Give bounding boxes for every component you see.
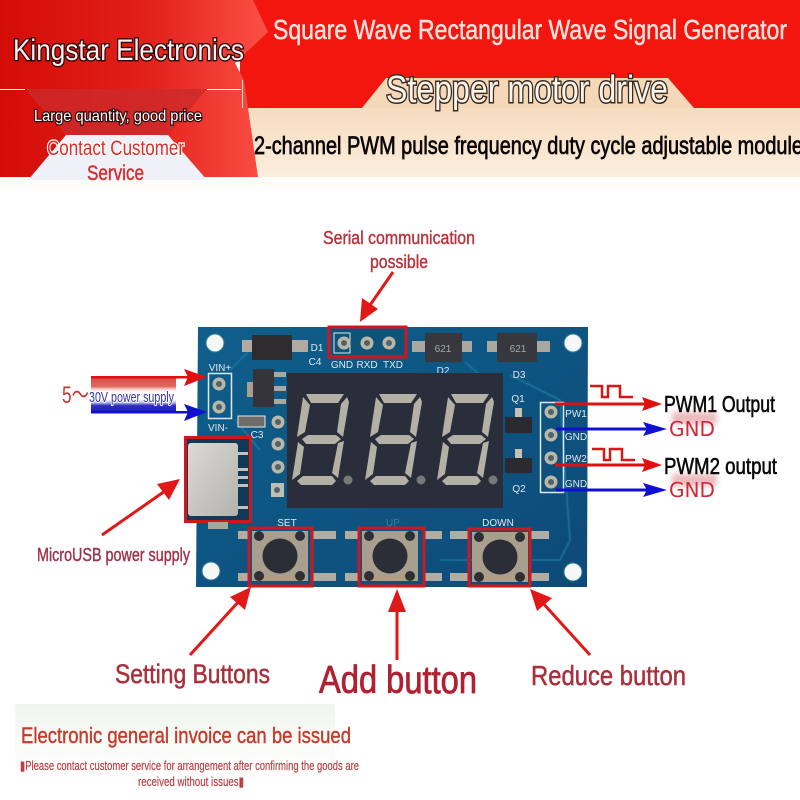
diode D3 (487, 333, 550, 381)
label: serial communication: Serial communication (323, 228, 475, 248)
label: voltage range (62, 382, 174, 409)
serial header: RXD (356, 360, 378, 371)
diode D2: D2 (437, 366, 450, 377)
label: GND2: GND (669, 478, 715, 502)
brand name: Kingstar Electronics (13, 34, 244, 67)
PWM2 pulse icon (592, 449, 635, 460)
regulator (247, 369, 286, 407)
label: voltage range: 5～ (62, 382, 89, 409)
button labels: SET (277, 518, 297, 529)
contact link (47, 137, 184, 185)
arrow: GND1 (556, 422, 667, 436)
diode D3: D3 (513, 370, 526, 381)
arrow: GND2 (556, 483, 667, 497)
arrow: VIN+ red (91, 369, 207, 393)
SET button (249, 528, 312, 586)
PWM output header (540, 402, 587, 492)
arrow: PWM2 (555, 458, 662, 472)
label: micro USB: MicroUSB power supply (37, 545, 190, 565)
power input header (208, 363, 232, 434)
header banner: right (0, 0, 800, 189)
button labels: DOWN (482, 518, 514, 529)
through holes (271, 416, 284, 497)
diode D1 (242, 335, 324, 368)
label: setting buttons: Setting Buttons (115, 659, 270, 689)
PWM output header: PW1 (565, 409, 587, 420)
LED display (287, 373, 503, 508)
invoice note: ▮Please contact customer service for arrangement after confirming the goods are (20, 758, 359, 773)
label: serial communication: possible (370, 252, 428, 272)
mounting holes (202, 334, 582, 581)
invoice note: received without issues▮ (138, 774, 244, 789)
diode D2 (412, 333, 472, 377)
arrow: set button (190, 587, 251, 655)
capacitor C3: C3 (251, 430, 264, 441)
transistor Q2: Q2 (512, 484, 526, 495)
DOWN button (469, 529, 530, 586)
title line 2: Stepper motor drive (386, 69, 668, 111)
tagline: Large quantity, good price (34, 108, 202, 125)
serial header (329, 327, 406, 371)
serial header: TXD (383, 360, 403, 371)
UP button (359, 528, 424, 586)
label: serial communication (323, 228, 475, 272)
label: voltage range: 30V power supply (89, 389, 174, 406)
diode D1: C4 (309, 357, 322, 368)
pink smudges behind output labels (672, 412, 717, 486)
invoice note (20, 758, 359, 789)
button labels (277, 518, 514, 529)
diode D2: 621 (435, 344, 452, 355)
contact link: Service (87, 162, 144, 185)
arrow: serial (360, 272, 393, 322)
PWM1 pulse icon (590, 386, 633, 397)
transistor Q2 (505, 449, 532, 495)
capacitor C3 (238, 416, 265, 441)
diode D3: 621 (510, 344, 527, 355)
contact link: Contact Customer (47, 137, 184, 160)
arrow: reduce button (530, 589, 590, 655)
header banner: left panel (0, 0, 268, 180)
power input header: VIN- (208, 423, 228, 434)
micro USB port (185, 437, 251, 529)
PWM output header: GND (565, 432, 587, 443)
button SMD pads (238, 531, 549, 581)
power input header: VIN+ (209, 363, 231, 374)
transistor Q1 (505, 394, 532, 433)
invoice notice panel (15, 704, 359, 790)
invoice heading: Electronic general invoice can be issued (21, 723, 351, 748)
diode D1: D1 (311, 343, 324, 354)
label: GND1: GND (669, 417, 715, 441)
circuit board (185, 327, 588, 587)
arrow: micro USB (102, 479, 180, 535)
arrow: PWM1 (555, 397, 662, 411)
transistor Q1: Q1 (511, 394, 525, 405)
arrow: VIN- blue (91, 398, 207, 421)
PWM output header: PW2 (565, 454, 587, 465)
label: PWM2 output: PWM2 output (664, 453, 777, 479)
button labels: UP (386, 518, 400, 529)
serial header: GND (331, 360, 353, 371)
arrow: add button (388, 589, 406, 660)
label: reduce button: Reduce button (531, 660, 686, 691)
PWM output header: GND (565, 479, 587, 490)
label: add button: Add button (319, 659, 477, 702)
